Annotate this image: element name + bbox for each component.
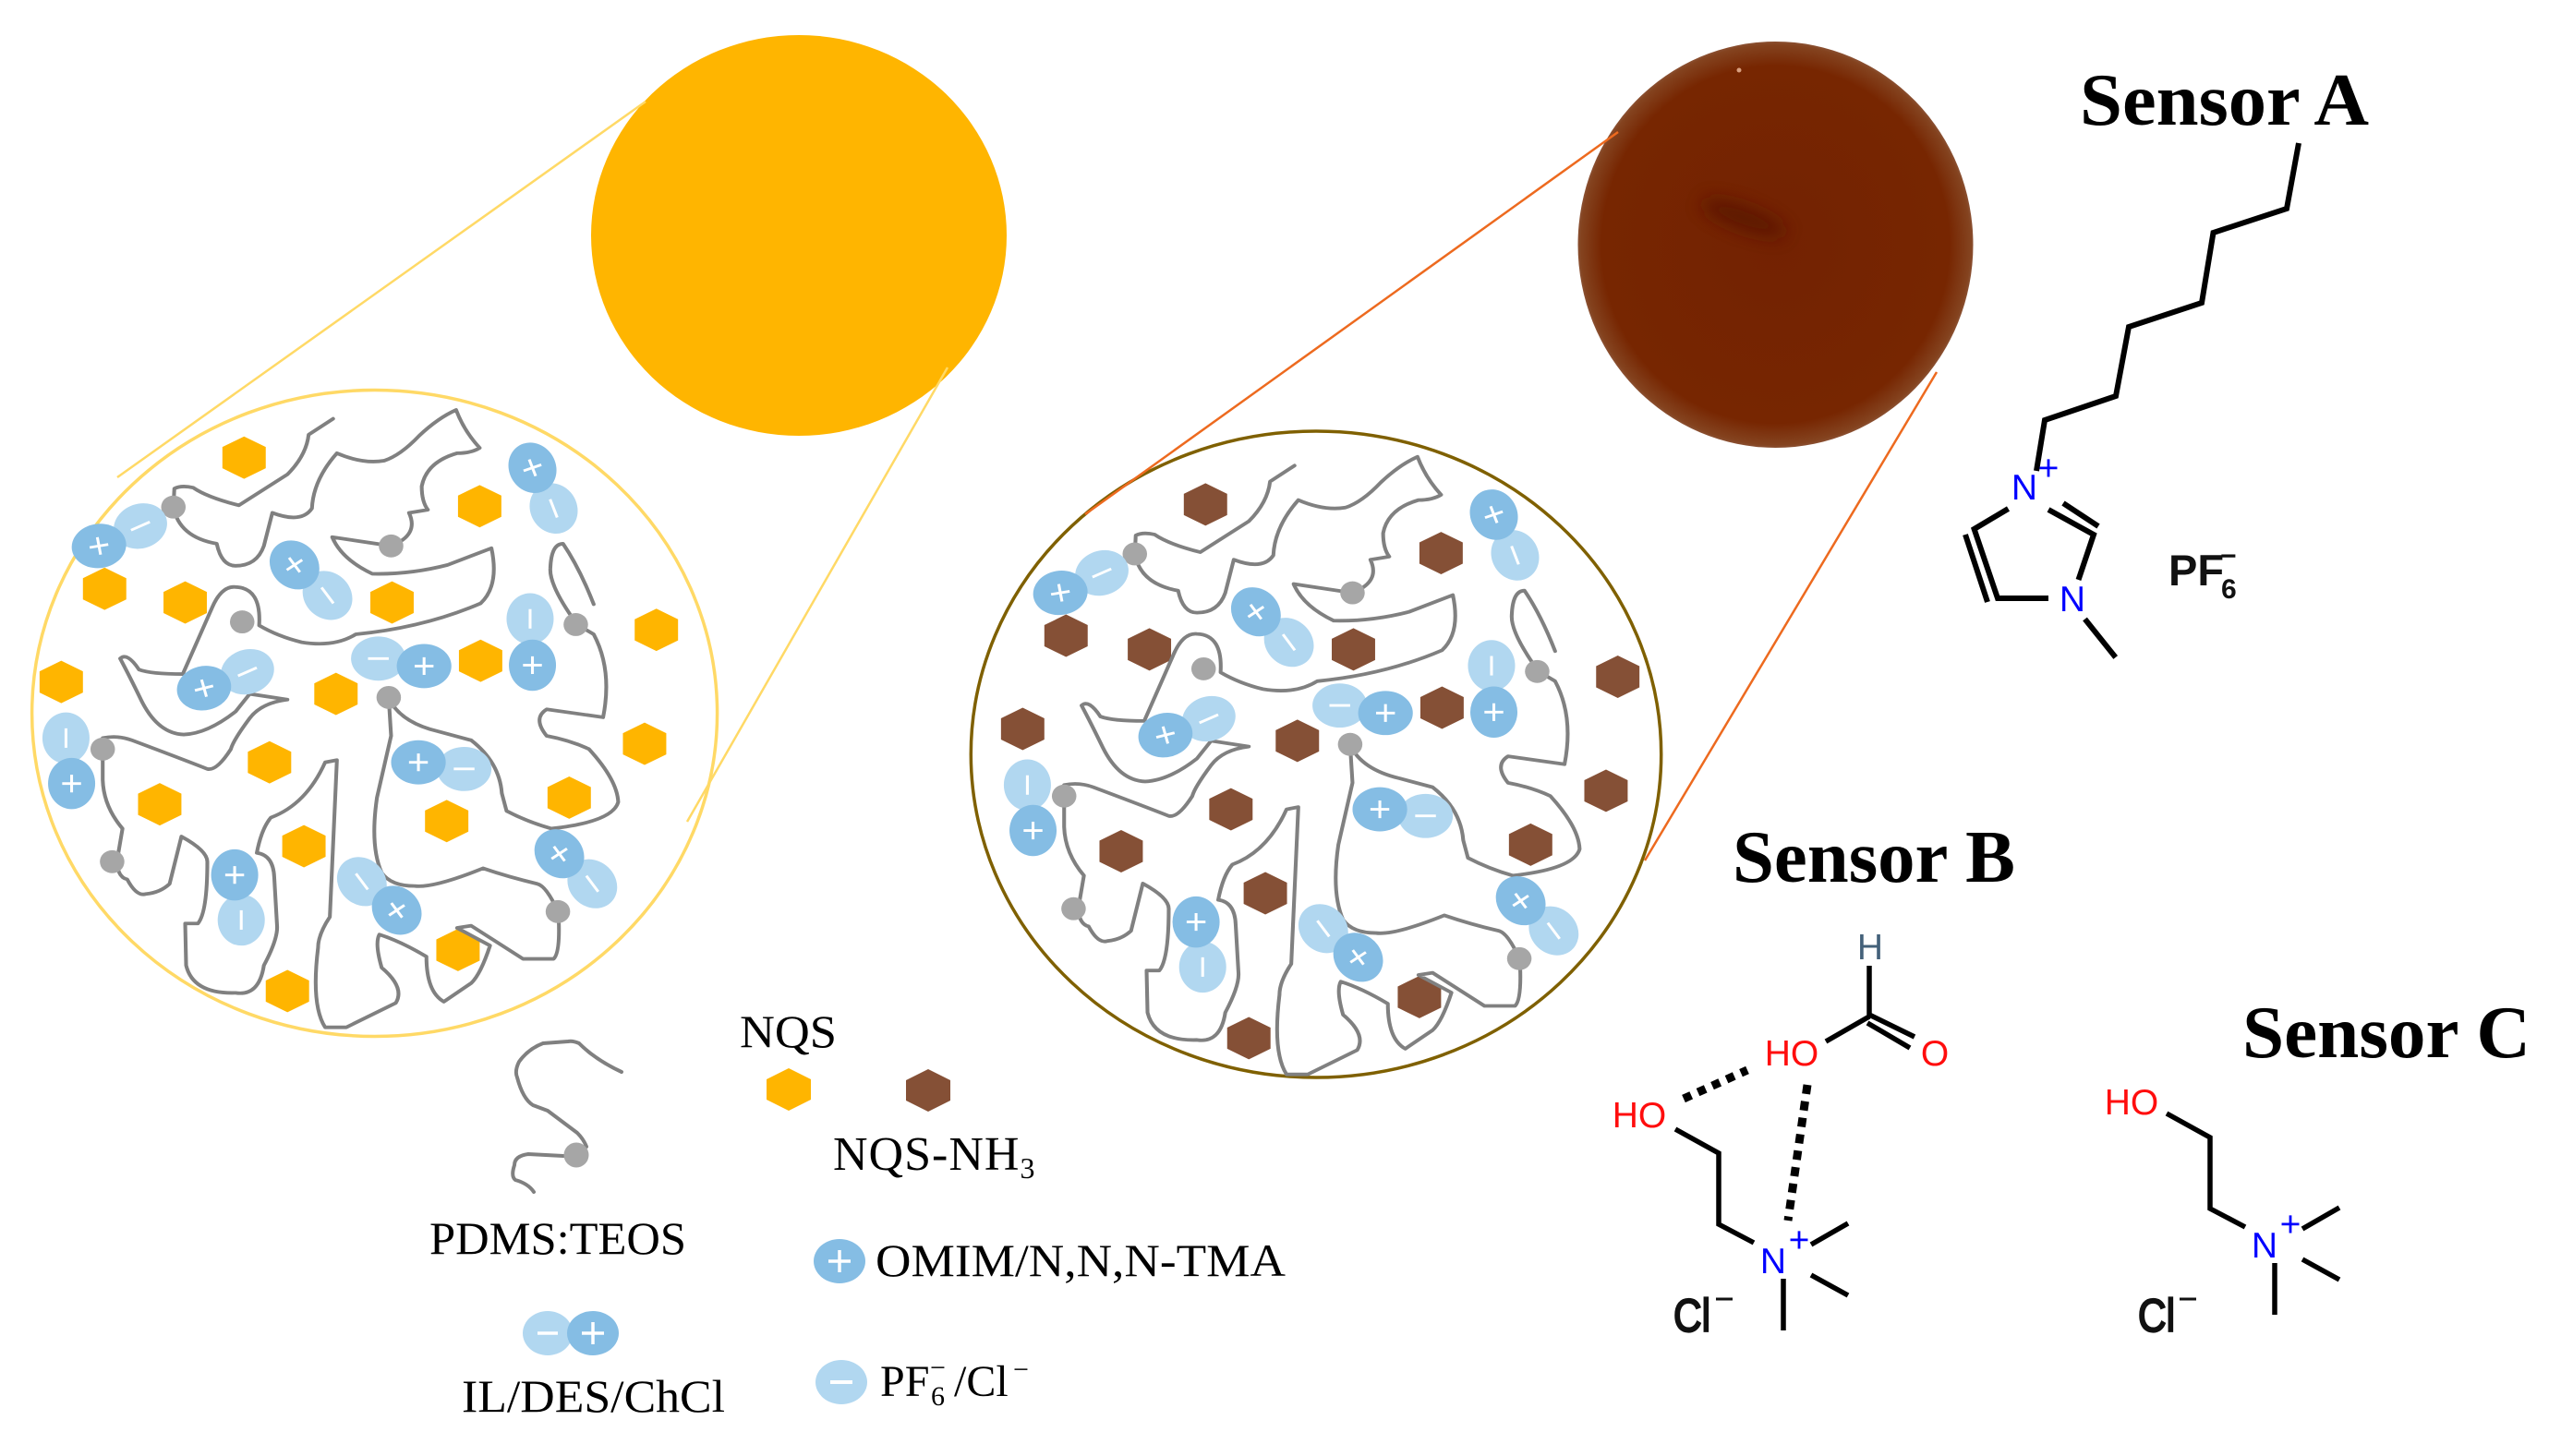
- heading: Sensor A: Sensor A: [2080, 60, 2369, 141]
- legend: NQS-NH3 hexagon: 3: [1020, 1151, 1035, 1185]
- molecule: DES choline chloride formic acid (Sensor B): HO: [1613, 1096, 1666, 1136]
- panel: matrix with NQS-NH3 (brown circle): [971, 431, 1661, 1077]
- molecule: DES choline chloride formic acid (Sensor B): HO: [1765, 1034, 1818, 1074]
- molecule: DES choline chloride formic acid (Sensor B): H: [1857, 928, 1883, 968]
- legend: PDMS:TEOS: PDMS:TEOS: [429, 1212, 686, 1264]
- legend: anion PF6-/Cl-: −: [930, 1353, 946, 1383]
- brown sensor film disc: [1577, 42, 1973, 448]
- molecule: choline chloride (Sensor C): Cl: [2138, 1290, 2175, 1342]
- molecule: choline chloride (Sensor C): HO: [2105, 1083, 2158, 1123]
- legend: cation OMIM/N,N,N-TMA: OMIM/N,N,N-TMA: [876, 1234, 1286, 1286]
- molecule: DES choline chloride formic acid (Sensor B): [1613, 928, 1949, 1342]
- legend: NQS hexagon: NQS: [740, 1005, 837, 1057]
- legend: anion PF6-/Cl-: /Cl: [954, 1357, 1009, 1406]
- molecule: OMIM PF6 (Sensor A): 6: [2221, 574, 2237, 605]
- legend: NQS-NH3 hexagon: [833, 1069, 1035, 1185]
- molecule: DES choline chloride formic acid (Sensor B): Cl: [1673, 1290, 1710, 1342]
- legend: anion PF6-/Cl-: [815, 1353, 1029, 1412]
- legend: anion PF6-/Cl-: −: [1013, 1354, 1029, 1385]
- legend: NQS hexagon: [740, 1005, 837, 1111]
- panel: matrix with NQS (yellow circle): [32, 390, 718, 1036]
- legend: anion PF6-/Cl-: 6: [931, 1381, 945, 1412]
- orange sensor film disc: [591, 35, 1007, 436]
- legend: ion pair IL/DES/ChCl: [462, 1311, 725, 1422]
- molecule: OMIM PF6 (Sensor A): [1965, 143, 2299, 657]
- legend: PDMS:TEOS: [429, 1041, 686, 1264]
- molecule: OMIM PF6 (Sensor A): +: [2038, 449, 2059, 488]
- molecule: choline chloride (Sensor C): N: [2252, 1226, 2277, 1266]
- zoom lines: yellow sensor film: [117, 102, 948, 822]
- legend: NQS-NH3 hexagon: NQS-NH: [833, 1128, 1020, 1181]
- molecule: OMIM PF6 (Sensor A): N: [2060, 580, 2085, 620]
- molecule: DES choline chloride formic acid (Sensor B): O: [1921, 1034, 1949, 1074]
- legend: ion pair IL/DES/ChCl: IL/DES/ChCl: [462, 1370, 725, 1422]
- legend: anion PF6-/Cl-: PF: [880, 1357, 929, 1406]
- molecule: OMIM PF6 (Sensor A): N: [2011, 468, 2037, 508]
- heading: Sensor B: Sensor B: [1733, 817, 2015, 898]
- molecule: choline chloride (Sensor C): +: [2280, 1205, 2301, 1245]
- molecule: DES choline chloride formic acid (Sensor B): N: [1760, 1242, 1786, 1282]
- zoom lines: brown sensor film: [1085, 132, 1937, 860]
- molecule: OMIM PF6 (Sensor A): −: [2220, 541, 2237, 572]
- molecule: OMIM PF6 (Sensor A): PF: [2168, 546, 2224, 595]
- heading: Sensor C: Sensor C: [2242, 993, 2531, 1074]
- molecule: choline chloride (Sensor C): [2105, 1083, 2339, 1342]
- molecule: DES choline chloride formic acid (Sensor B): +: [1789, 1221, 1809, 1260]
